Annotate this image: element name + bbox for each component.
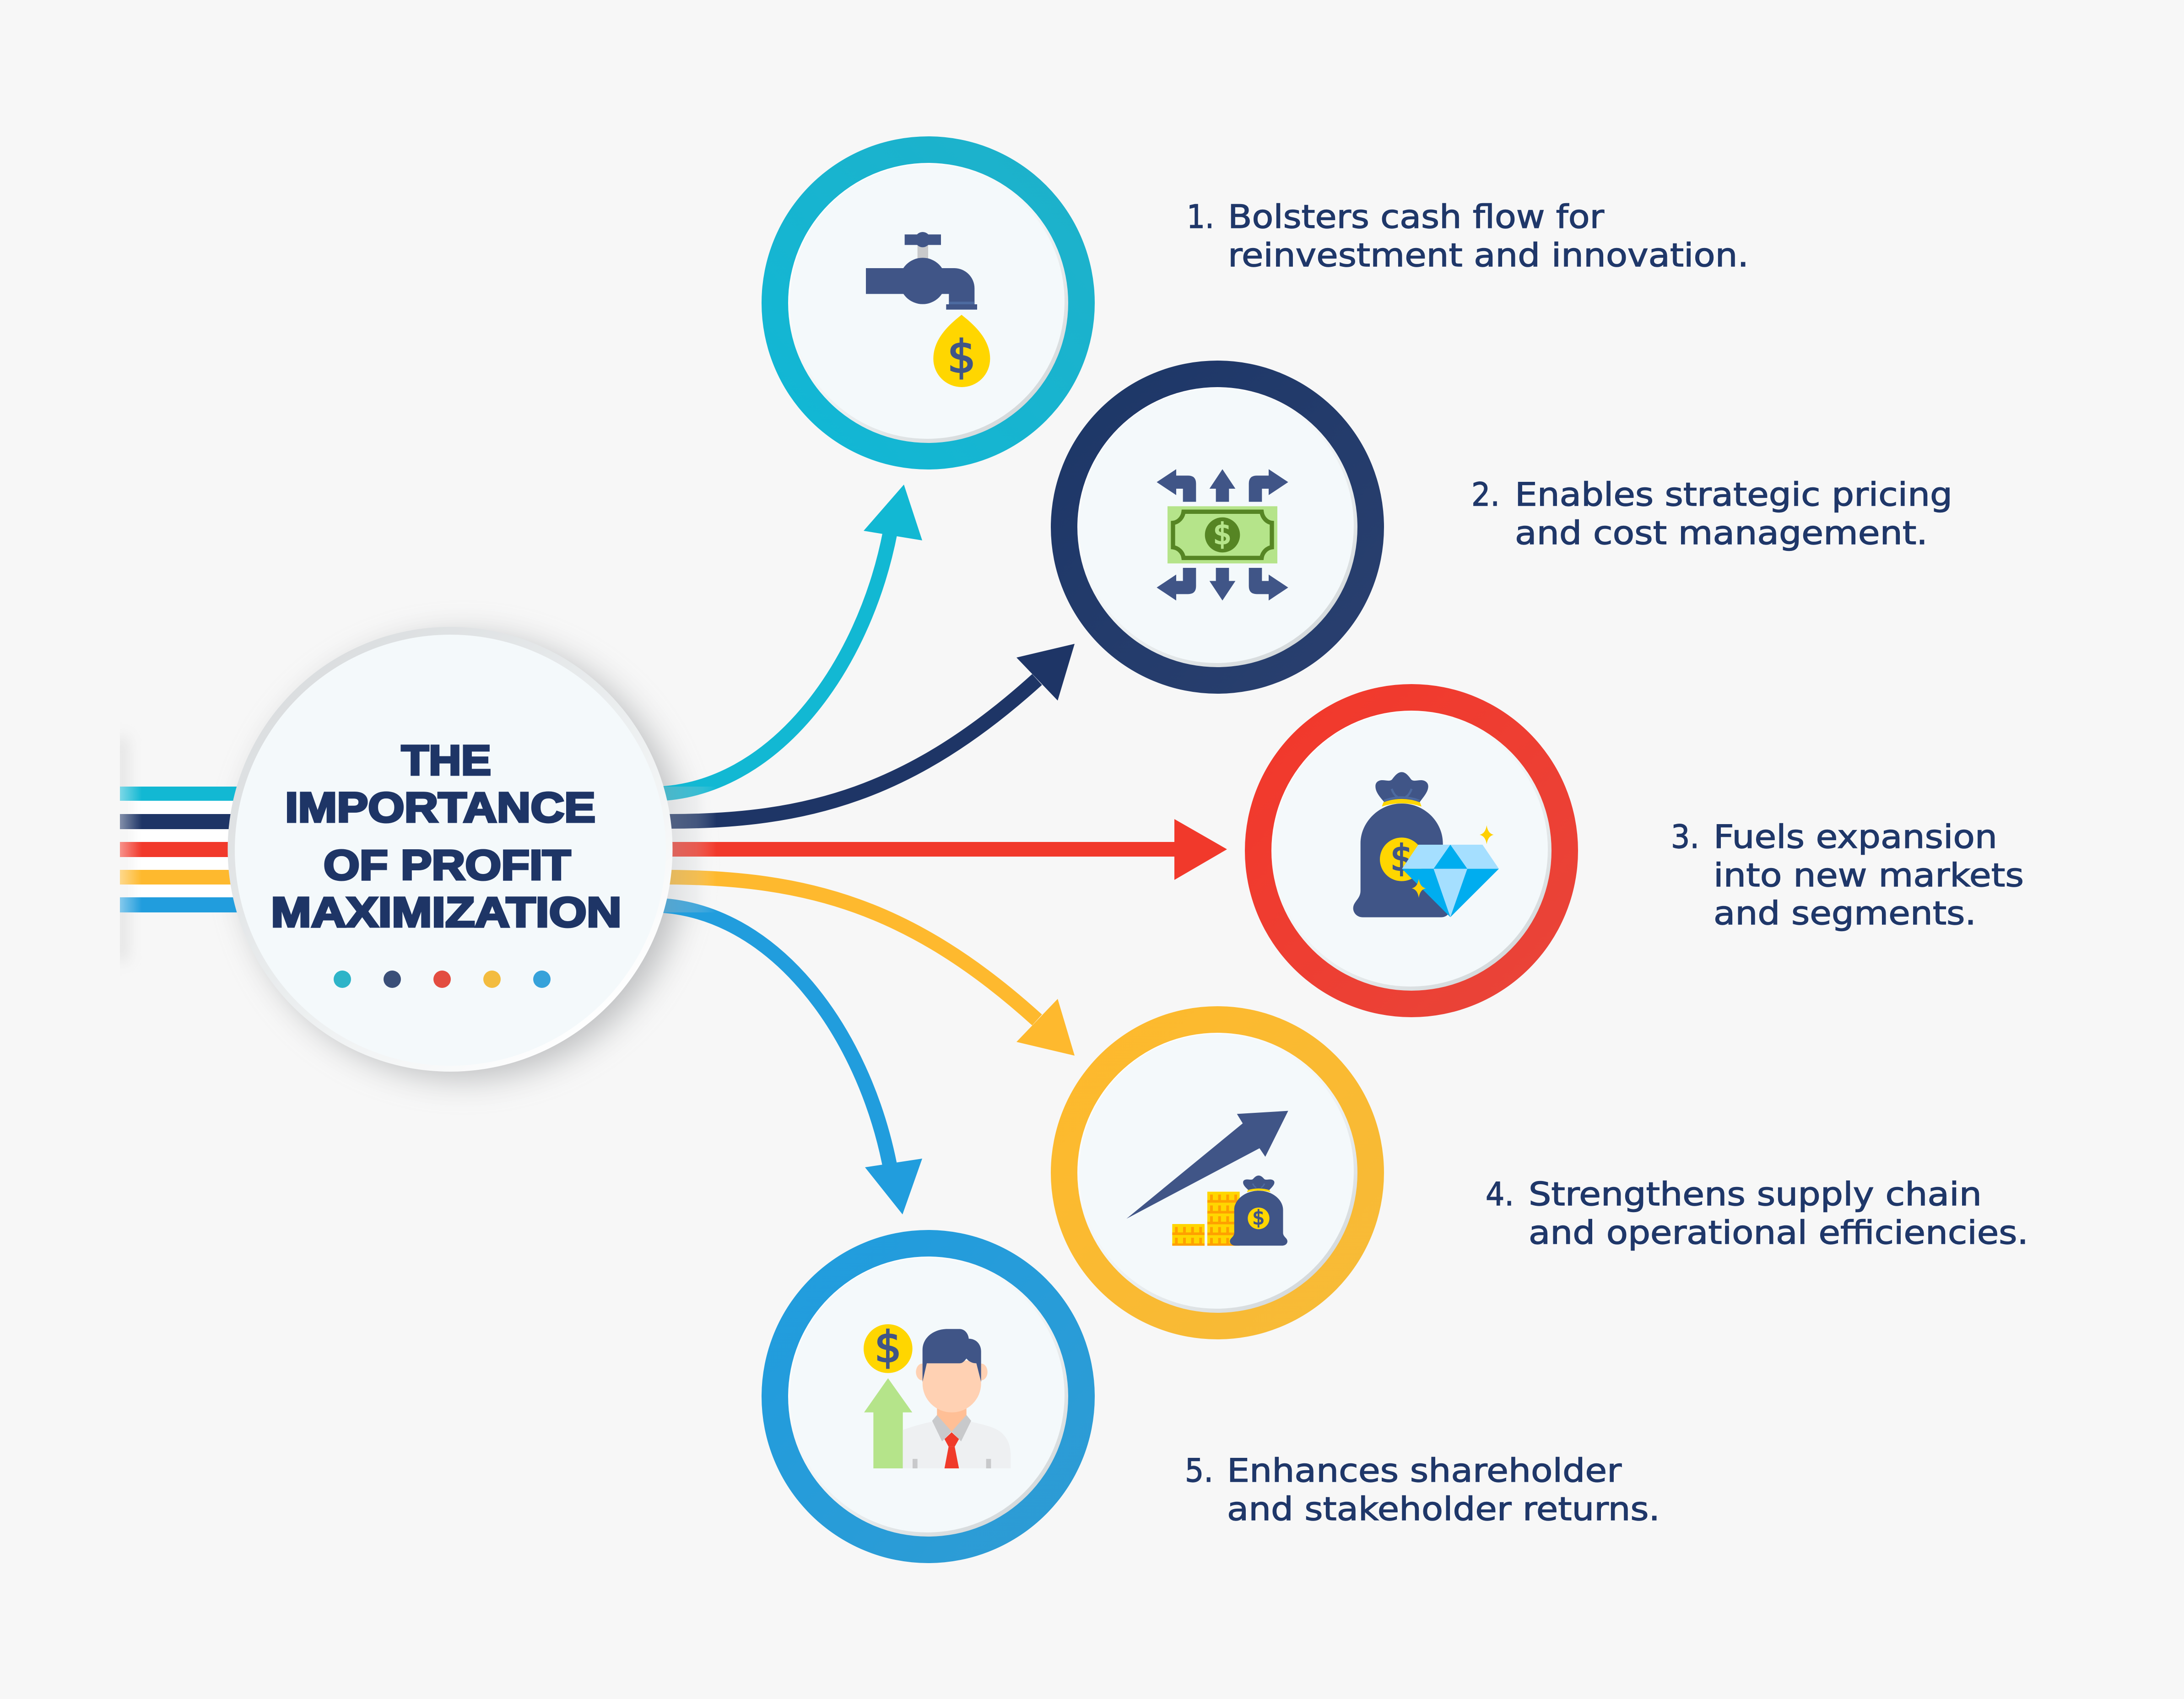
- text: point 3: [1671, 818, 2024, 932]
- icon: banknote with six arrows: $: [1213, 517, 1232, 550]
- icon: faucet with dollar drop: $: [947, 331, 976, 383]
- panel: circle 3 ring: [1245, 684, 1578, 1017]
- text: point 4: [1486, 1176, 2028, 1251]
- text: point 1: reinvestment and innovation.: [1228, 237, 1749, 274]
- title: THE: [401, 737, 491, 784]
- central circle shadow: [242, 636, 685, 1079]
- text: point 4: 4.: [1486, 1176, 1514, 1213]
- title: [271, 737, 622, 936]
- text: point 3: Fuels expansion: [1714, 818, 1997, 856]
- panel: circle 2 ring: [1051, 361, 1384, 694]
- text: point 4: Strengthens supply chain: [1529, 1176, 1982, 1213]
- text: point 3: 3.: [1671, 818, 1699, 856]
- text: point 5: and stakeholder returns.: [1227, 1490, 1660, 1528]
- icon: banknote with six arrows: [1157, 469, 1288, 600]
- text: point 2: 2.: [1471, 476, 1500, 513]
- arrow start highlight: [659, 787, 717, 912]
- colour dots: [334, 971, 551, 988]
- icon: money bag with diamond: [1353, 772, 1499, 917]
- text: point 5: 5.: [1185, 1452, 1213, 1489]
- arrow 3: red to circle 3: [654, 819, 1227, 880]
- arrow 5: blue to circle 5: [654, 905, 922, 1214]
- text: point 5: Enhances shareholder: [1227, 1452, 1622, 1489]
- left stripes band: [82, 705, 266, 993]
- icon: businessman with rising arrow and coin: $: [875, 1322, 902, 1372]
- icon: growth arrow, coins and bag: $: [1252, 1207, 1265, 1230]
- title: OF PROFIT: [324, 842, 571, 889]
- text: point 1: 1.: [1187, 198, 1214, 236]
- panel: central title circle: [228, 627, 673, 1072]
- title: IMPORTANCE: [285, 784, 595, 831]
- text: point 2: [1471, 476, 1952, 552]
- arrow 4: yellow to circle 4: [654, 877, 1075, 1056]
- panel: circle 5 ring: [762, 1230, 1095, 1563]
- panel: circle 1 ring: [762, 136, 1095, 469]
- text: point 2: Enables strategic pricing: [1515, 476, 1952, 513]
- icon: money bag with diamond: $: [1390, 837, 1413, 879]
- arrow 1: cyan to circle 1: [654, 485, 922, 794]
- text: point 5: [1185, 1452, 1660, 1528]
- icon: growth arrow, coins and bag: [1126, 1111, 1288, 1246]
- text: point 1: Bolsters cash flow for: [1228, 198, 1604, 236]
- text: point 1: [1187, 198, 1749, 274]
- text: point 4: and operational efficiencies.: [1529, 1214, 2028, 1251]
- text: point 3: and segments.: [1714, 895, 1976, 932]
- icon: businessman with rising arrow and coin: [864, 1322, 1011, 1468]
- text: point 3: into new markets: [1714, 857, 2024, 894]
- arrow 2: navy to circle 2: [654, 644, 1075, 821]
- icon: faucet with dollar drop: [866, 232, 990, 387]
- title: MAXIMIZATION: [271, 889, 622, 936]
- text: point 2: and cost management.: [1515, 514, 1928, 552]
- panel: circle 4 ring: [1051, 1006, 1384, 1339]
